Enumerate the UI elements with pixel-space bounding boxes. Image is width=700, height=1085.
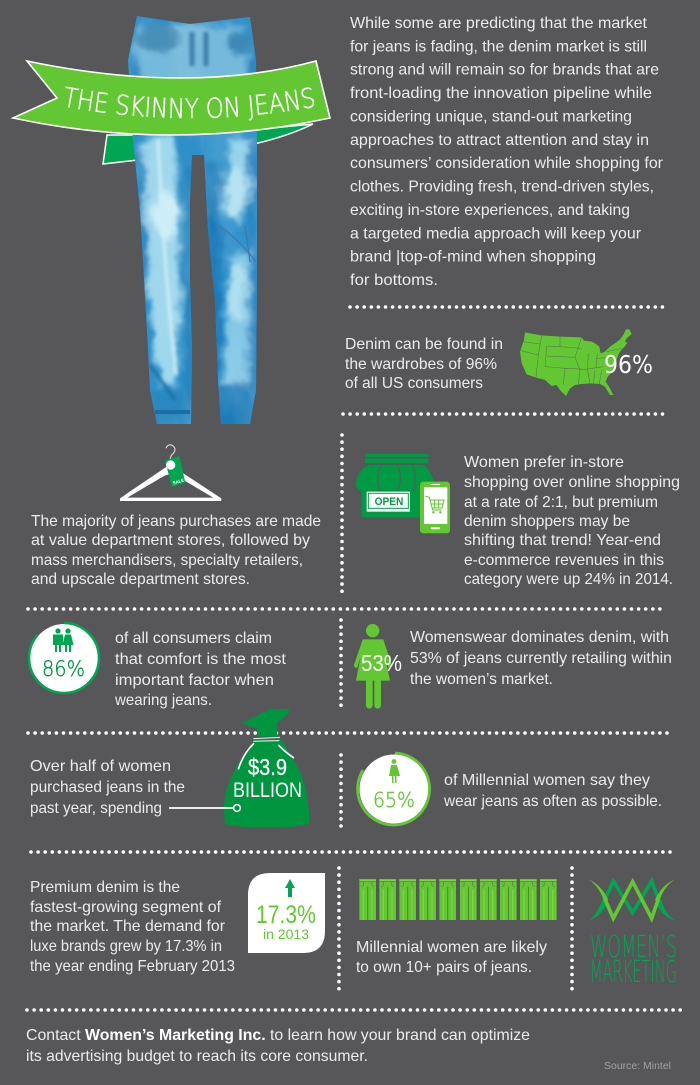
comfort text: that comfort is the most [115,651,287,668]
store preference text: denim shoppers may be [464,513,630,530]
icon: money bag with $3.9 billion [169,708,309,827]
86% figure: 86% [42,657,85,681]
denim wardrobes text: the wardrobes of 96% [345,356,497,373]
comfort text: wearing jeans. [114,692,212,709]
icon: hanger with sale tag [120,445,221,501]
open sign text: OPEN [375,496,403,508]
icon: woman with 53% [354,624,402,709]
store preference text: category were up 24% in 2014. [464,571,673,588]
purchases text: The majority of jeans purchases are made [31,513,321,530]
banner back fold [103,124,313,164]
womenswear text [410,629,672,688]
contact text: its advertising budget to reach its core consumer. [26,1048,368,1065]
store preference text: e-commerce revenues in this [464,552,664,569]
intro paragraph: front-loading the innovation pipeline while [350,85,652,102]
premium denim text: the market. The demand for [30,918,226,935]
store preference text: at a rate of 2:1, but premium [464,494,658,511]
premium denim text [30,879,235,975]
millennial wear text [443,772,662,810]
millennial ownership text: to own 10+ pairs of jeans. [356,959,532,976]
intro paragraph: for jeans is fading, the denim market is still [350,38,647,55]
contact text: Contact Women’s Marketing Inc. to learn how your brand can optimize [26,1027,530,1044]
purchases text: and upscale department stores. [31,571,250,588]
year: in 2013 [263,926,309,942]
purchases text: mass merchandisers, specialty retailers, [31,552,303,569]
womenswear text: Womenswear dominates denim, with [410,629,669,646]
womenswear text: 53% of jeans currently retailing within [410,650,672,667]
store preference text: shifting that trend! Year-end [464,532,661,549]
over half text: purchased jeans in the [30,779,185,796]
map of the United States [520,329,632,396]
icon: couple [53,628,74,652]
banner ribbon [13,61,330,135]
intro paragraph: considering unique, stand-out marketing [350,108,632,126]
comfort text: important factor when [115,672,274,689]
comfort text: of all consumers claim [115,630,272,647]
icon: storefront and phone [356,454,450,533]
premium denim text: Premium denim is the [30,879,180,896]
contact text [26,1027,530,1065]
intro paragraph: brand |top-of-mind when shopping [350,249,596,266]
source: Source: Mintel [604,1060,671,1072]
intro paragraph: exciting in-store experiences, and taking [350,202,630,219]
icon: woman [389,759,400,783]
unit: BILLION [233,779,302,802]
stat card: 17.3% [248,873,325,953]
percentage: 17.3% [256,901,316,929]
denim wardrobes text [345,336,503,392]
amount: $3.9 [248,754,287,780]
premium denim text: luxe brands grew by 17.3% in [30,938,222,955]
logo: Women's Marketing [588,879,677,990]
intro paragraph: approaches to attract attention and stay in [350,132,649,149]
store preference text: Women prefer in-store [464,454,624,471]
premium denim text: the year ending February 2013 [30,958,235,975]
intro paragraph: a targeted media approach will keep your [350,225,642,242]
53% figure: 53% [361,650,402,676]
purchases text [31,513,321,588]
leader line with tag [169,807,233,809]
arrow [285,879,295,897]
illustration: watercolor jeans [128,16,257,424]
millennial ownership text [356,939,547,976]
pictogram: ten pairs of jeans [359,879,557,920]
intro paragraph [350,15,664,289]
millennial wear text: of Millennial women say they [444,772,650,789]
millennial wear text: wear jeans as often as possible. [443,793,662,810]
title: THE SKINNY ON JEANS [66,86,314,120]
stat circle: 65% [358,753,430,825]
womenswear text: the women’s market. [410,671,553,688]
logo mark [588,879,675,921]
65% figure: 65% [373,788,415,812]
title banner [10,60,331,136]
stat circle: 86% [29,623,99,693]
intro paragraph: consumers’ consideration while shopping for [350,155,664,172]
intro paragraph: for bottoms. [350,272,438,289]
millennial ownership text: Millennial women are likely [356,939,547,956]
sale tag text: SALE [172,477,185,486]
over half text: Over half of women [30,758,171,775]
intro paragraph: strong and will remain so for brands that are [350,62,659,79]
icon: US map with 96% [520,329,653,396]
denim wardrobes text: Denim can be found in [345,336,503,353]
comfort text [114,630,287,709]
store preference text: shopping over online shopping [464,474,680,491]
store preference text [464,454,680,588]
premium denim text: fastest-growing segment of [30,899,222,916]
purchases text: at value department stores, followed by [31,532,310,549]
intro paragraph: clothes. Providing fresh, trend-driven styles, [350,178,654,196]
over half text: past year, spending [30,800,162,817]
intro paragraph: While some are predicting that the market [350,15,648,32]
96% figure: 96% [604,350,653,379]
over half text [30,758,185,817]
denim wardrobes text: of all US consumers [345,375,483,392]
